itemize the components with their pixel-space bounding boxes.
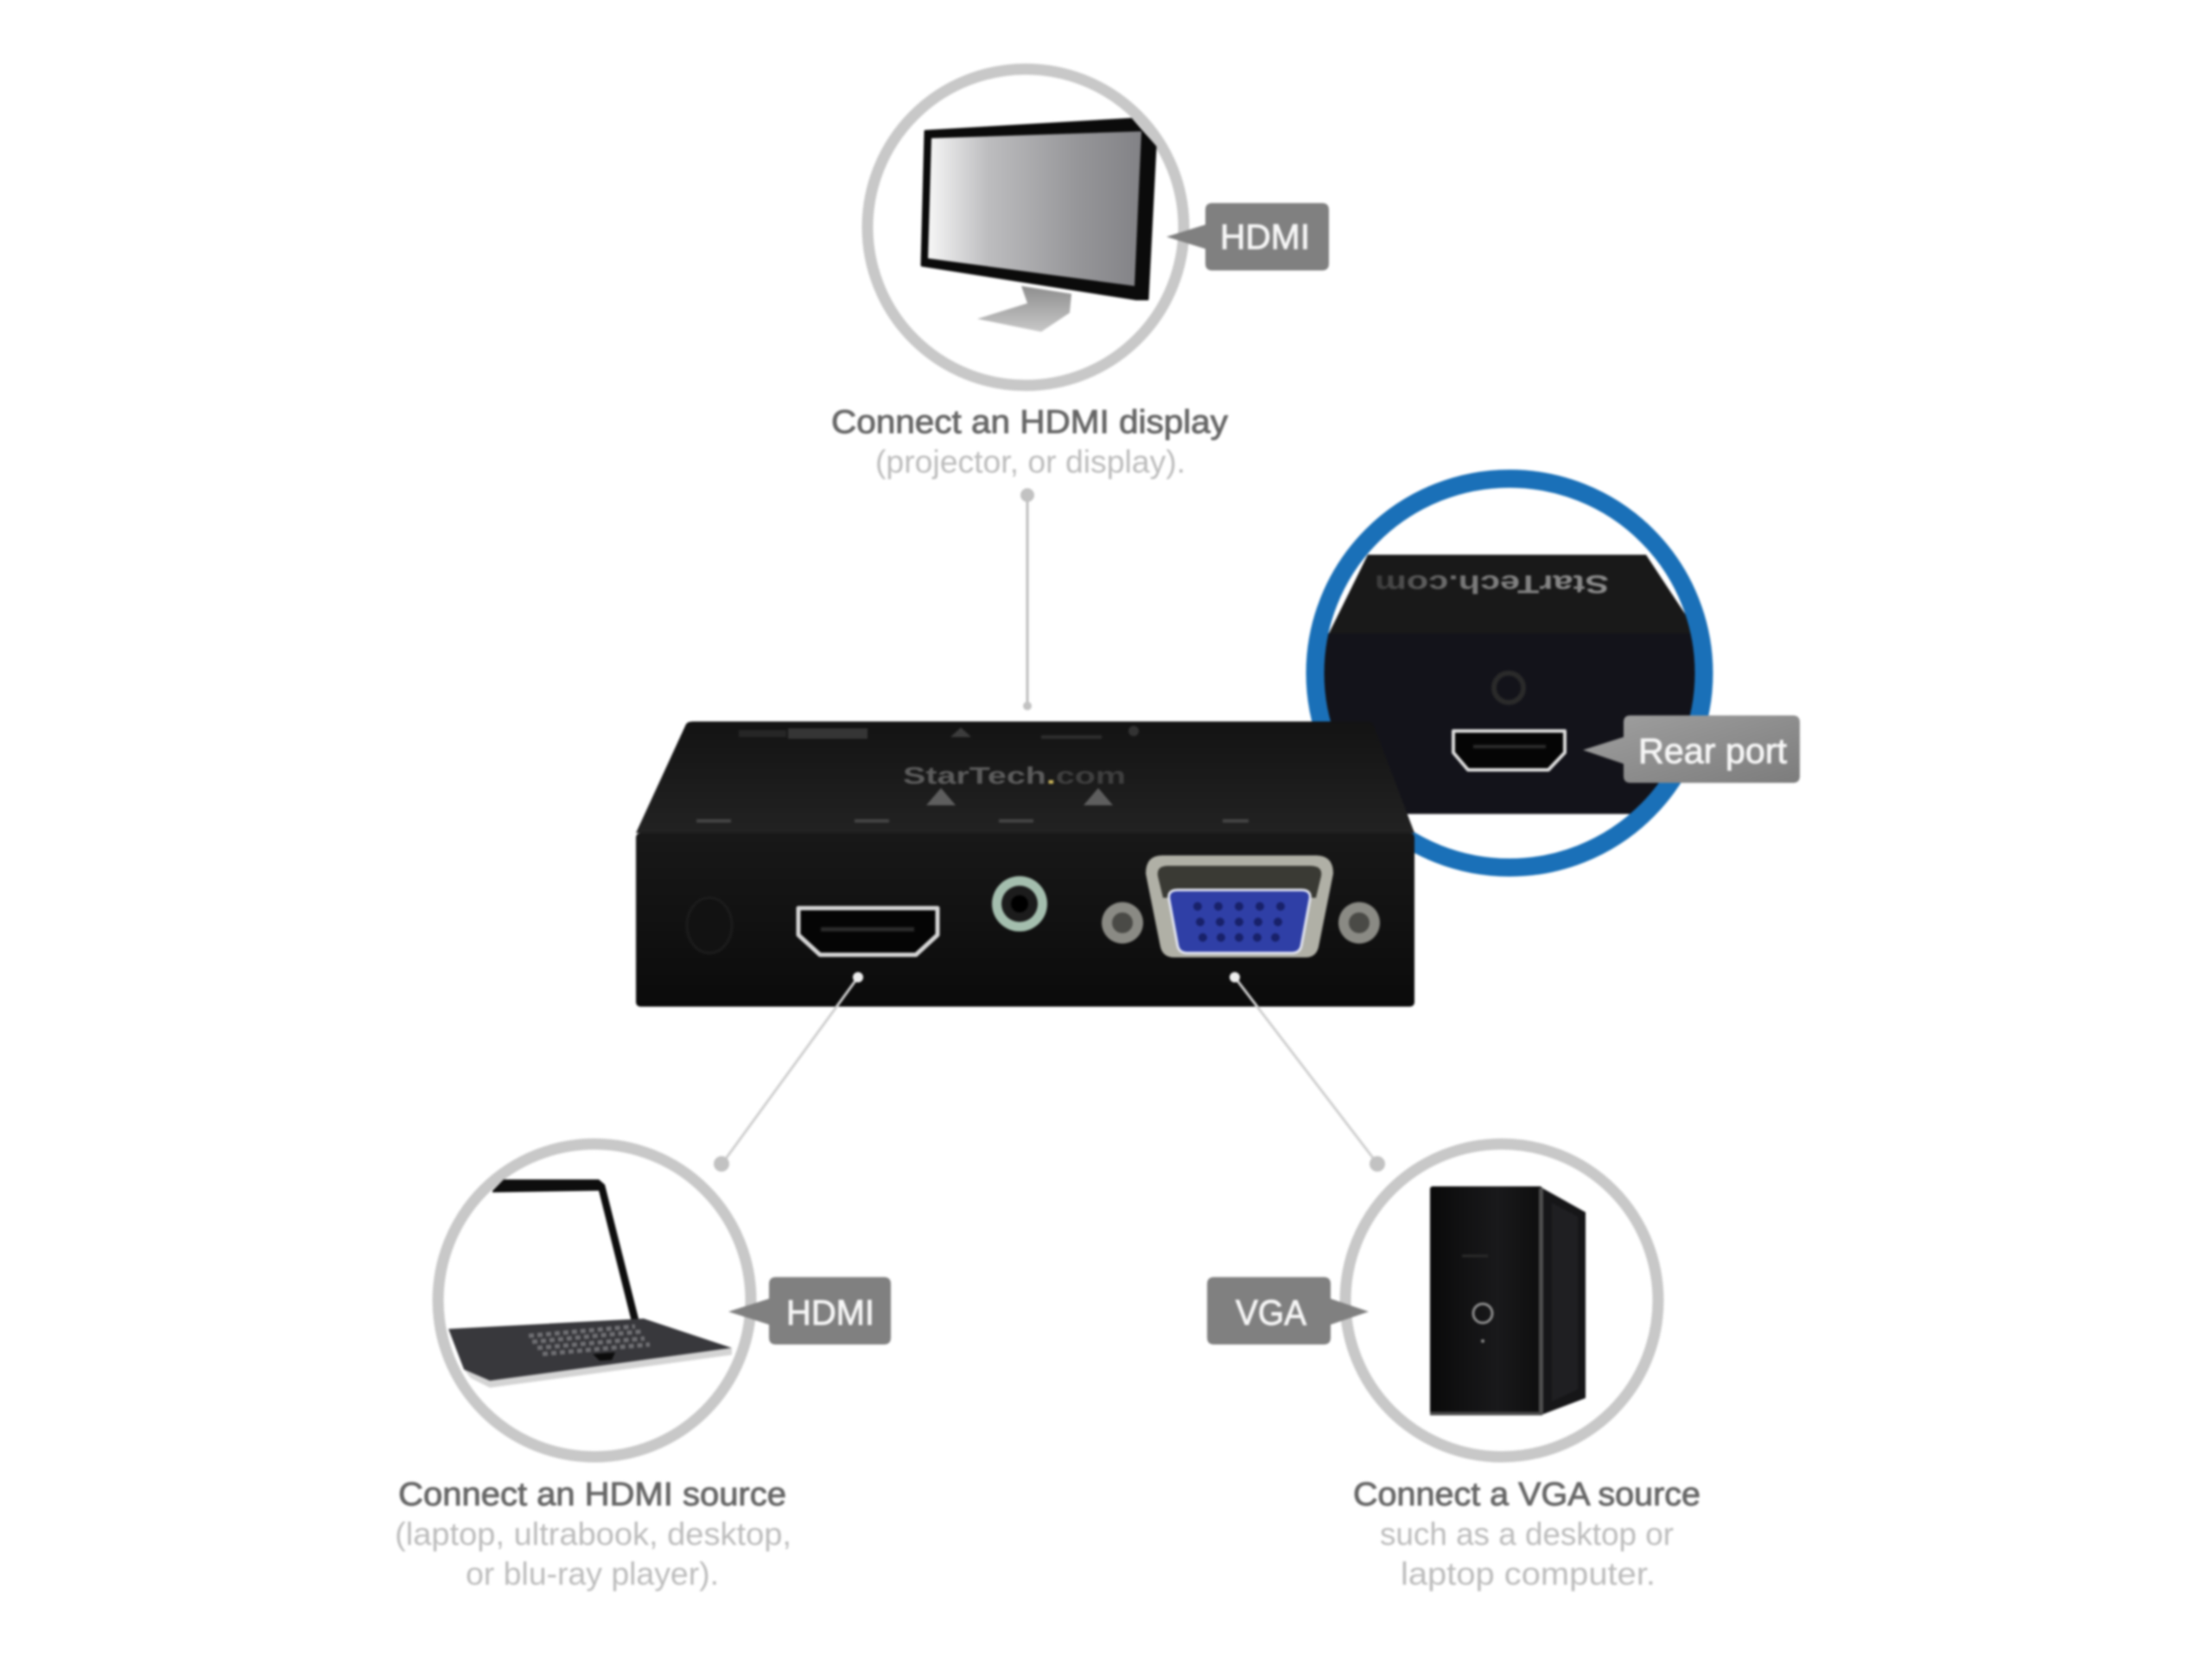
- panel: VGA source: [1207, 1144, 1700, 1592]
- caption: VGA source: laptop computer.: [1401, 1556, 1656, 1592]
- circle ring: display: [868, 69, 1184, 385]
- connector line: HDMI source: [714, 972, 863, 1172]
- icon: tower computer: [1430, 1186, 1586, 1415]
- badge: VGA: [1207, 1277, 1369, 1344]
- panel: rear port inset: [1313, 479, 1704, 868]
- icon: power socket: [687, 898, 732, 953]
- icon: laptop: [448, 1179, 732, 1388]
- device front face: [636, 833, 1414, 1007]
- badge: rear port: Rear port: [1638, 731, 1788, 771]
- badge: HDMI input: HDMI: [786, 1293, 874, 1332]
- badge: HDMI output: HDMI: [1220, 217, 1310, 257]
- connector line: VGA source: [1230, 972, 1385, 1172]
- panel: HDMI display: [831, 69, 1329, 480]
- circle ring: computer: [1345, 1144, 1658, 1457]
- rear view of device: StarTech.com: [1375, 569, 1609, 598]
- panel: HDMI source: [395, 1144, 891, 1592]
- caption: HDMI source: or blu-ray player).: [466, 1556, 719, 1592]
- caption: HDMI source: (laptop, ultrabook, desktop,: [395, 1516, 791, 1552]
- caption: display: Connect an HDMI display: [831, 404, 1228, 441]
- caption: display: [831, 404, 1228, 480]
- HDMI port: [798, 908, 938, 955]
- badge: HDMI output: [1166, 203, 1329, 270]
- icon: monitor: [922, 119, 1155, 332]
- device top face: StarTech .com: [903, 762, 1126, 789]
- device: front view: [636, 721, 1414, 1007]
- caption: VGA source: [1353, 1477, 1700, 1592]
- badge: VGA: VGA: [1236, 1293, 1307, 1332]
- caption: VGA source: Connect a VGA source: [1353, 1477, 1700, 1513]
- blue ring: [1315, 479, 1704, 868]
- audio jack: [992, 876, 1047, 931]
- caption: display: (projector, or display).: [875, 444, 1185, 480]
- badge: HDMI input: [728, 1277, 891, 1344]
- connector line: display to device: [1020, 488, 1034, 710]
- device top face: [636, 721, 1414, 833]
- caption: VGA source: such as a desktop or: [1380, 1516, 1674, 1552]
- badge: rear port: [1583, 715, 1800, 783]
- circle ring: laptop: [438, 1144, 751, 1457]
- rear view of device: [1313, 555, 1702, 814]
- VGA port: [1102, 855, 1380, 957]
- caption: HDMI source: [395, 1477, 791, 1592]
- caption: HDMI source: Connect an HDMI source: [398, 1477, 786, 1513]
